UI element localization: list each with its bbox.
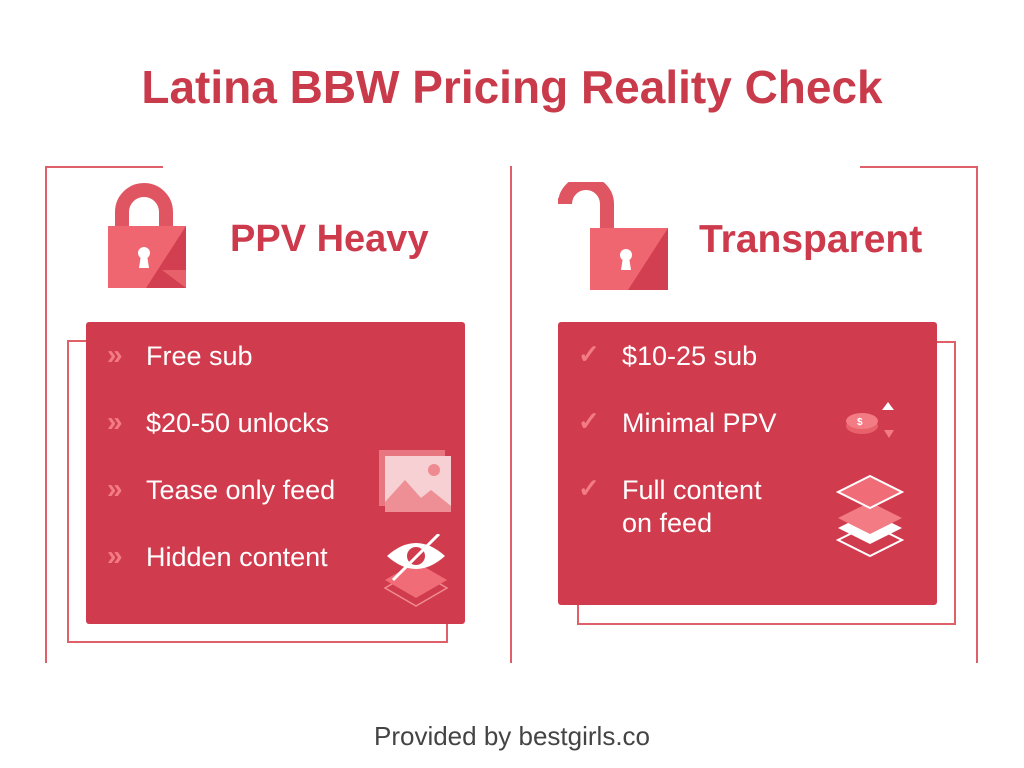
item: Free sub: Free sub xyxy=(146,341,253,371)
item: Hidden content: Hidden content xyxy=(146,542,328,572)
footer: Provided by bestgirls.co xyxy=(374,721,650,751)
panel: Transparent: ✓ xyxy=(578,473,600,503)
panel: Transparent: ✓ xyxy=(578,339,600,369)
icon: open lock xyxy=(558,182,668,290)
panel: PPV Heavy: » xyxy=(107,540,123,571)
icon: coin with arrows: $ xyxy=(857,417,863,428)
panel: Transparent xyxy=(558,322,956,625)
item: $20-50 unlocks: $20-50 unlocks xyxy=(146,408,329,438)
heading: Transparent: Transparent xyxy=(699,218,922,261)
icon: blurred image xyxy=(379,450,451,512)
panel: Transparent: ✓ xyxy=(578,406,600,436)
icon: hidden eye with layers xyxy=(384,534,448,607)
panel: PPV Heavy: » xyxy=(107,406,123,437)
icon: closed lock xyxy=(108,183,186,288)
item: $10-25 sub: $10-25 sub xyxy=(622,341,757,371)
icon: coin with arrows xyxy=(846,402,894,438)
panel: PPV Heavy: » xyxy=(107,473,123,504)
panel: PPV Heavy xyxy=(67,322,465,643)
item: Minimal PPV: Minimal PPV xyxy=(622,408,777,438)
item: Full content on feed: Full content xyxy=(622,475,762,505)
item: Tease only feed: Tease only feed xyxy=(146,475,335,505)
heading: PPV Heavy: PPV Heavy xyxy=(230,218,429,260)
panel: PPV Heavy: » xyxy=(107,339,123,370)
item: Full content on feed: on feed xyxy=(622,508,712,538)
title: Latina BBW Pricing Reality Check xyxy=(141,61,883,113)
item: Full content on feed xyxy=(578,473,762,538)
item: Free sub xyxy=(107,339,253,371)
icon: layers xyxy=(836,474,904,558)
